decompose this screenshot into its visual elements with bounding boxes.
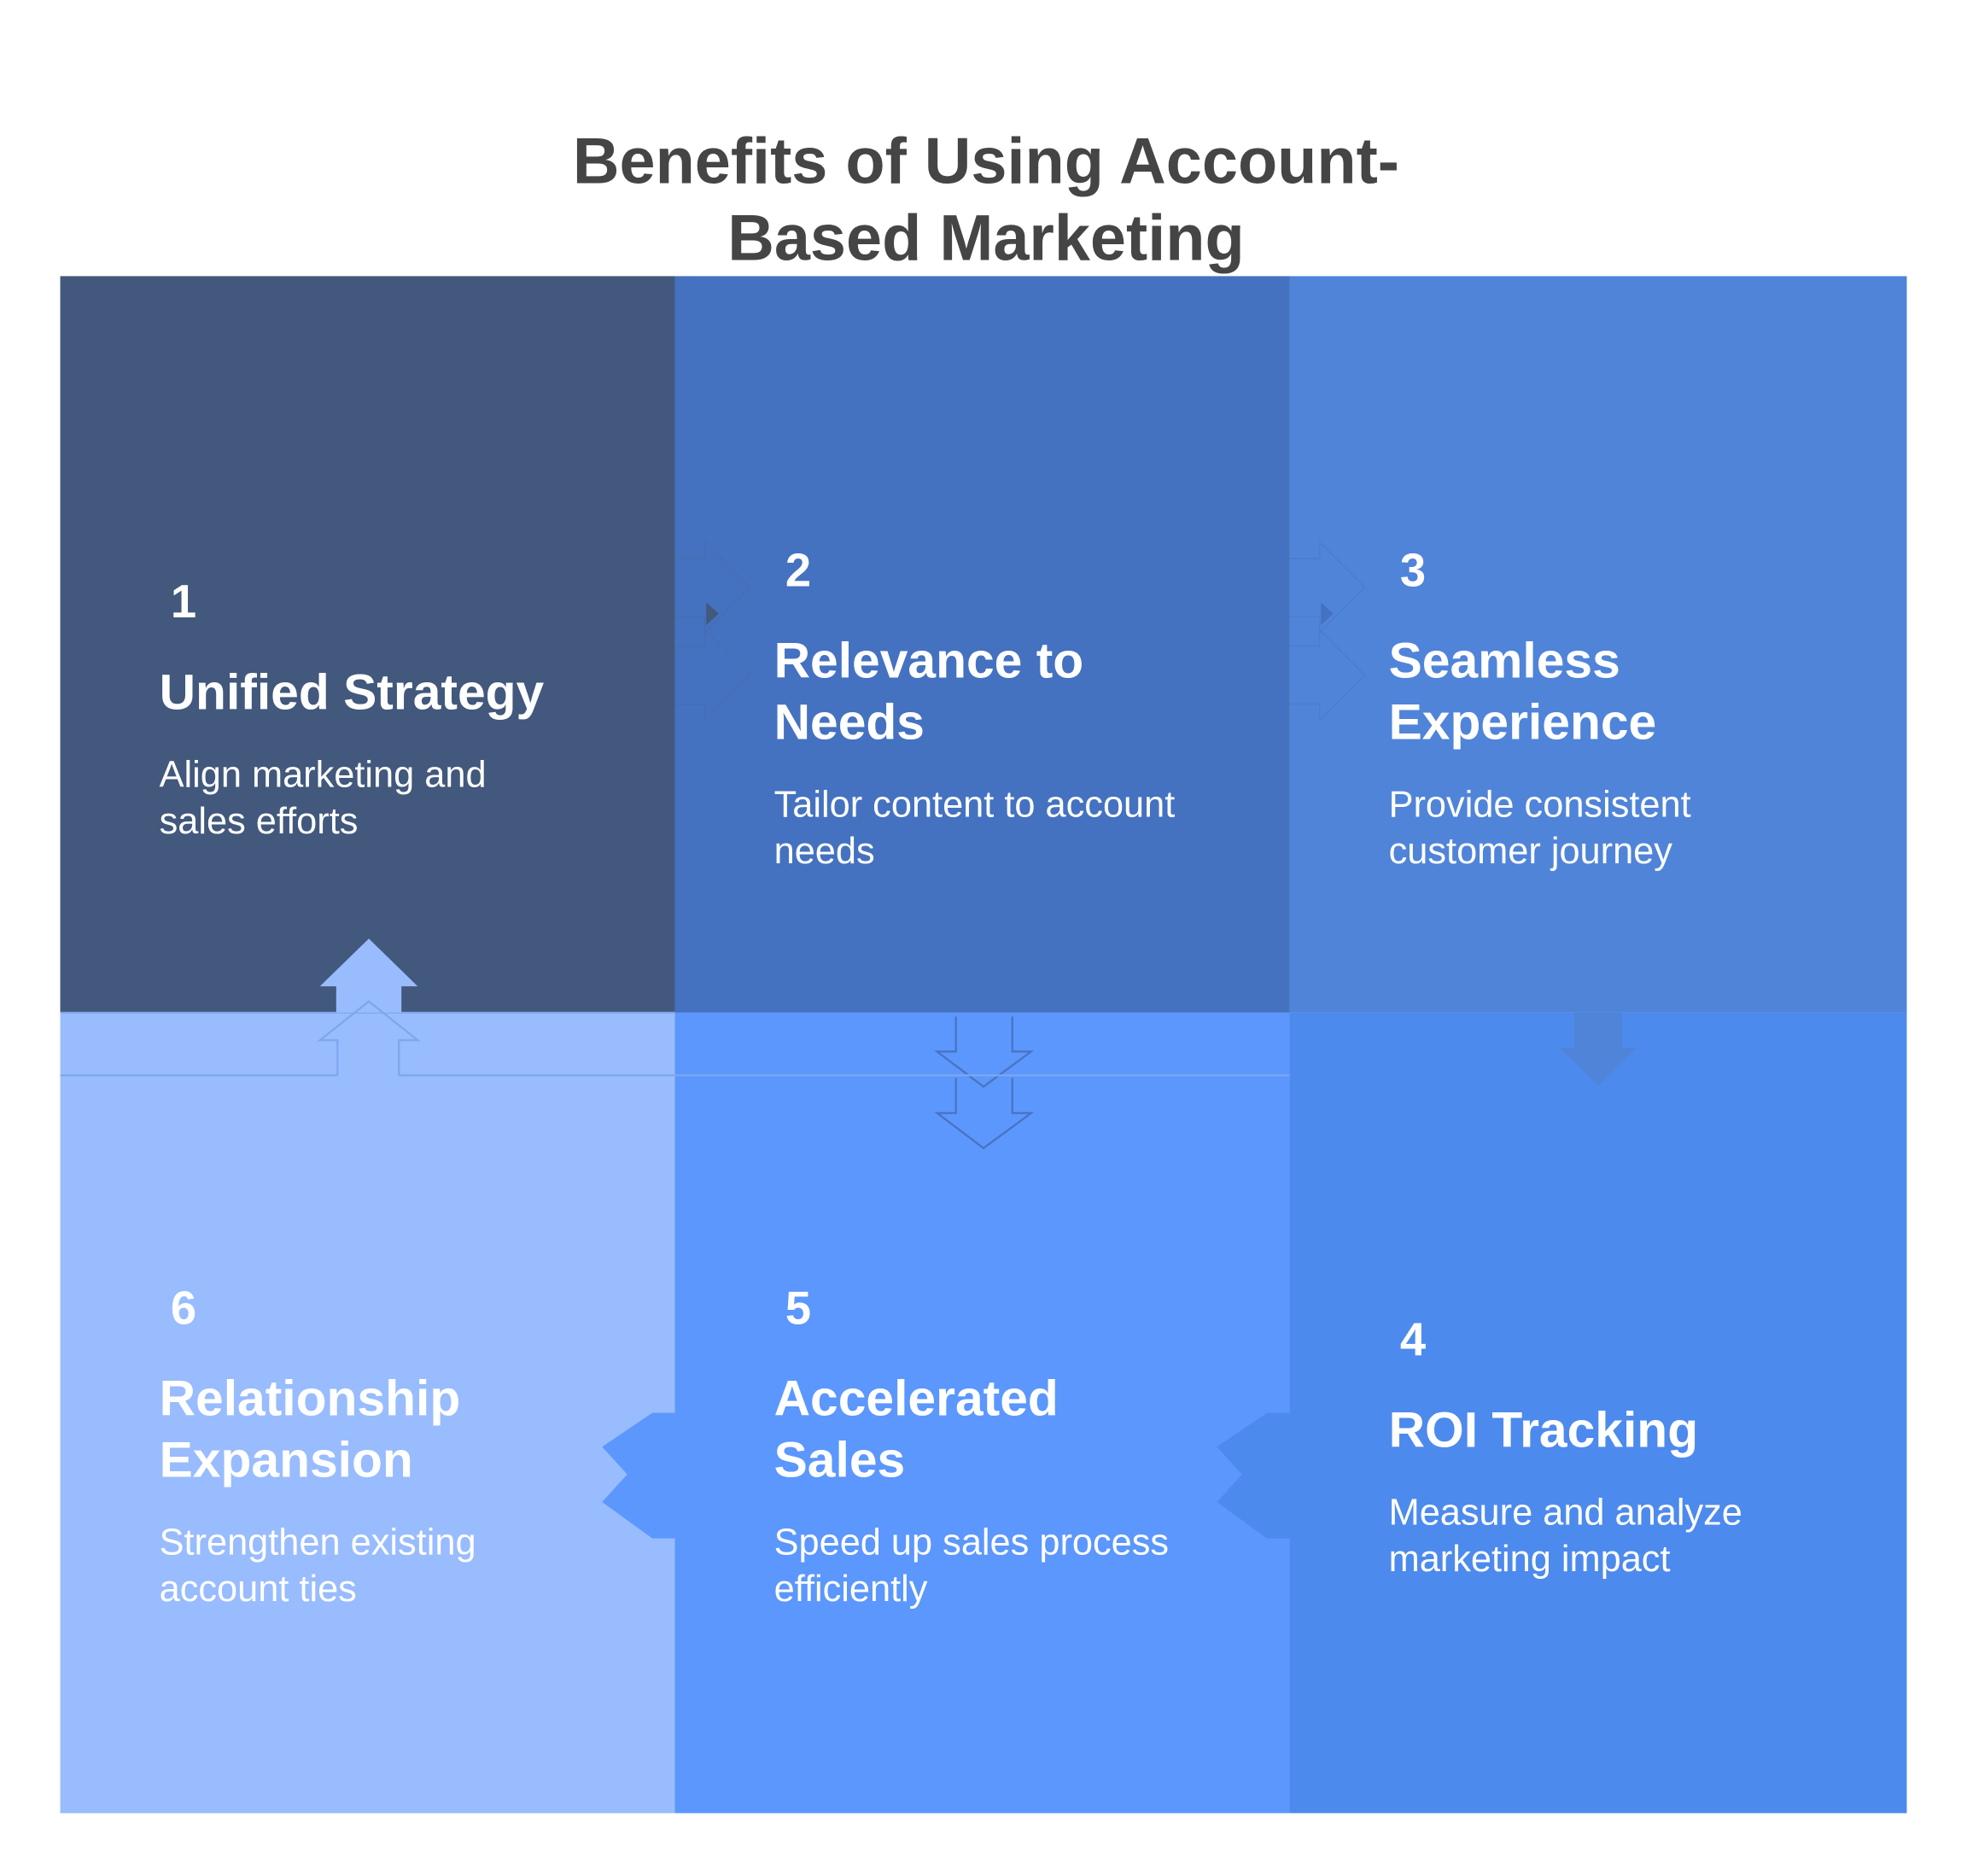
- arrow: 6 to 1: [61, 938, 1290, 1075]
- title: Benefits of Using Account-: [573, 126, 1399, 198]
- panel 2: Relevance to Needs: Tailor content to account: [774, 785, 1175, 826]
- panel 3: Seamless Experience: [1290, 276, 1906, 1013]
- panel 6: Relationship Expansion: Strengthen existing: [160, 1522, 476, 1563]
- panel 4: ROI Tracking: [1290, 1013, 1906, 1813]
- arrow: 2 to 5: [937, 1016, 1031, 1148]
- panel 4: ROI Tracking: marketing impact: [1389, 1539, 1671, 1580]
- arrow: 1 to 2: [675, 542, 750, 721]
- panel 2: Relevance to Needs: 2: [785, 544, 811, 596]
- panel 3: Seamless Experience: Seamless: [1389, 634, 1620, 689]
- panel 1: Unified Strategy: 1: [171, 576, 196, 628]
- panel 5: Accelerated Sales: Accelerated: [774, 1371, 1059, 1427]
- panel 2: Relevance to Needs: Relevance to: [774, 634, 1083, 689]
- title: [573, 126, 1399, 274]
- panel 2: Relevance to Needs: [675, 276, 1290, 1013]
- panel 6: Relationship Expansion: [61, 1013, 675, 1813]
- arrow: 3 to 4: [1559, 1013, 1637, 1085]
- arrow: 5 to 6: [602, 1397, 675, 1556]
- panel 1: Unified Strategy: Align marketing and: [160, 754, 487, 795]
- panel 6: Relationship Expansion: account ties: [160, 1569, 357, 1610]
- panel 5: Accelerated Sales: Sales: [774, 1433, 905, 1488]
- panel 3: Seamless Experience: Provide consistent: [1389, 785, 1691, 826]
- panel 5: Accelerated Sales: 5: [785, 1282, 811, 1334]
- panel 2: Relevance to Needs: needs: [774, 831, 875, 872]
- panel 2: Relevance to Needs: Needs: [774, 695, 925, 751]
- panel 1: Unified Strategy: [61, 276, 675, 1013]
- panel 3: Seamless Experience: Experience: [1389, 695, 1656, 751]
- arrow: 4 to 5: [1217, 1397, 1290, 1556]
- panel 3: Seamless Experience: customer journey: [1389, 831, 1672, 872]
- panel 5: Accelerated Sales: efficiently: [774, 1569, 928, 1610]
- panel 4: ROI Tracking: ROI Tracking: [1389, 1402, 1698, 1458]
- panel 4: ROI Tracking: Measure and analyze: [1389, 1492, 1742, 1533]
- panel 6: Relationship Expansion: 6: [171, 1282, 196, 1334]
- panel 6: Relationship Expansion: Relationship: [160, 1371, 460, 1427]
- panel 5: Accelerated Sales: [675, 1013, 1290, 1813]
- panel 1: Unified Strategy: sales efforts: [160, 801, 358, 842]
- panel 3: Seamless Experience: 3: [1400, 544, 1426, 596]
- title: Based Marketing: [727, 202, 1245, 274]
- panel 1: Unified Strategy: Unified Strategy: [160, 664, 545, 720]
- panel 5: Accelerated Sales: Speed up sales process: [774, 1522, 1169, 1563]
- panel 6: Relationship Expansion: Expansion: [160, 1433, 413, 1488]
- panel 4: ROI Tracking: 4: [1400, 1313, 1426, 1365]
- arrow: 2 to 3: [1290, 542, 1365, 721]
